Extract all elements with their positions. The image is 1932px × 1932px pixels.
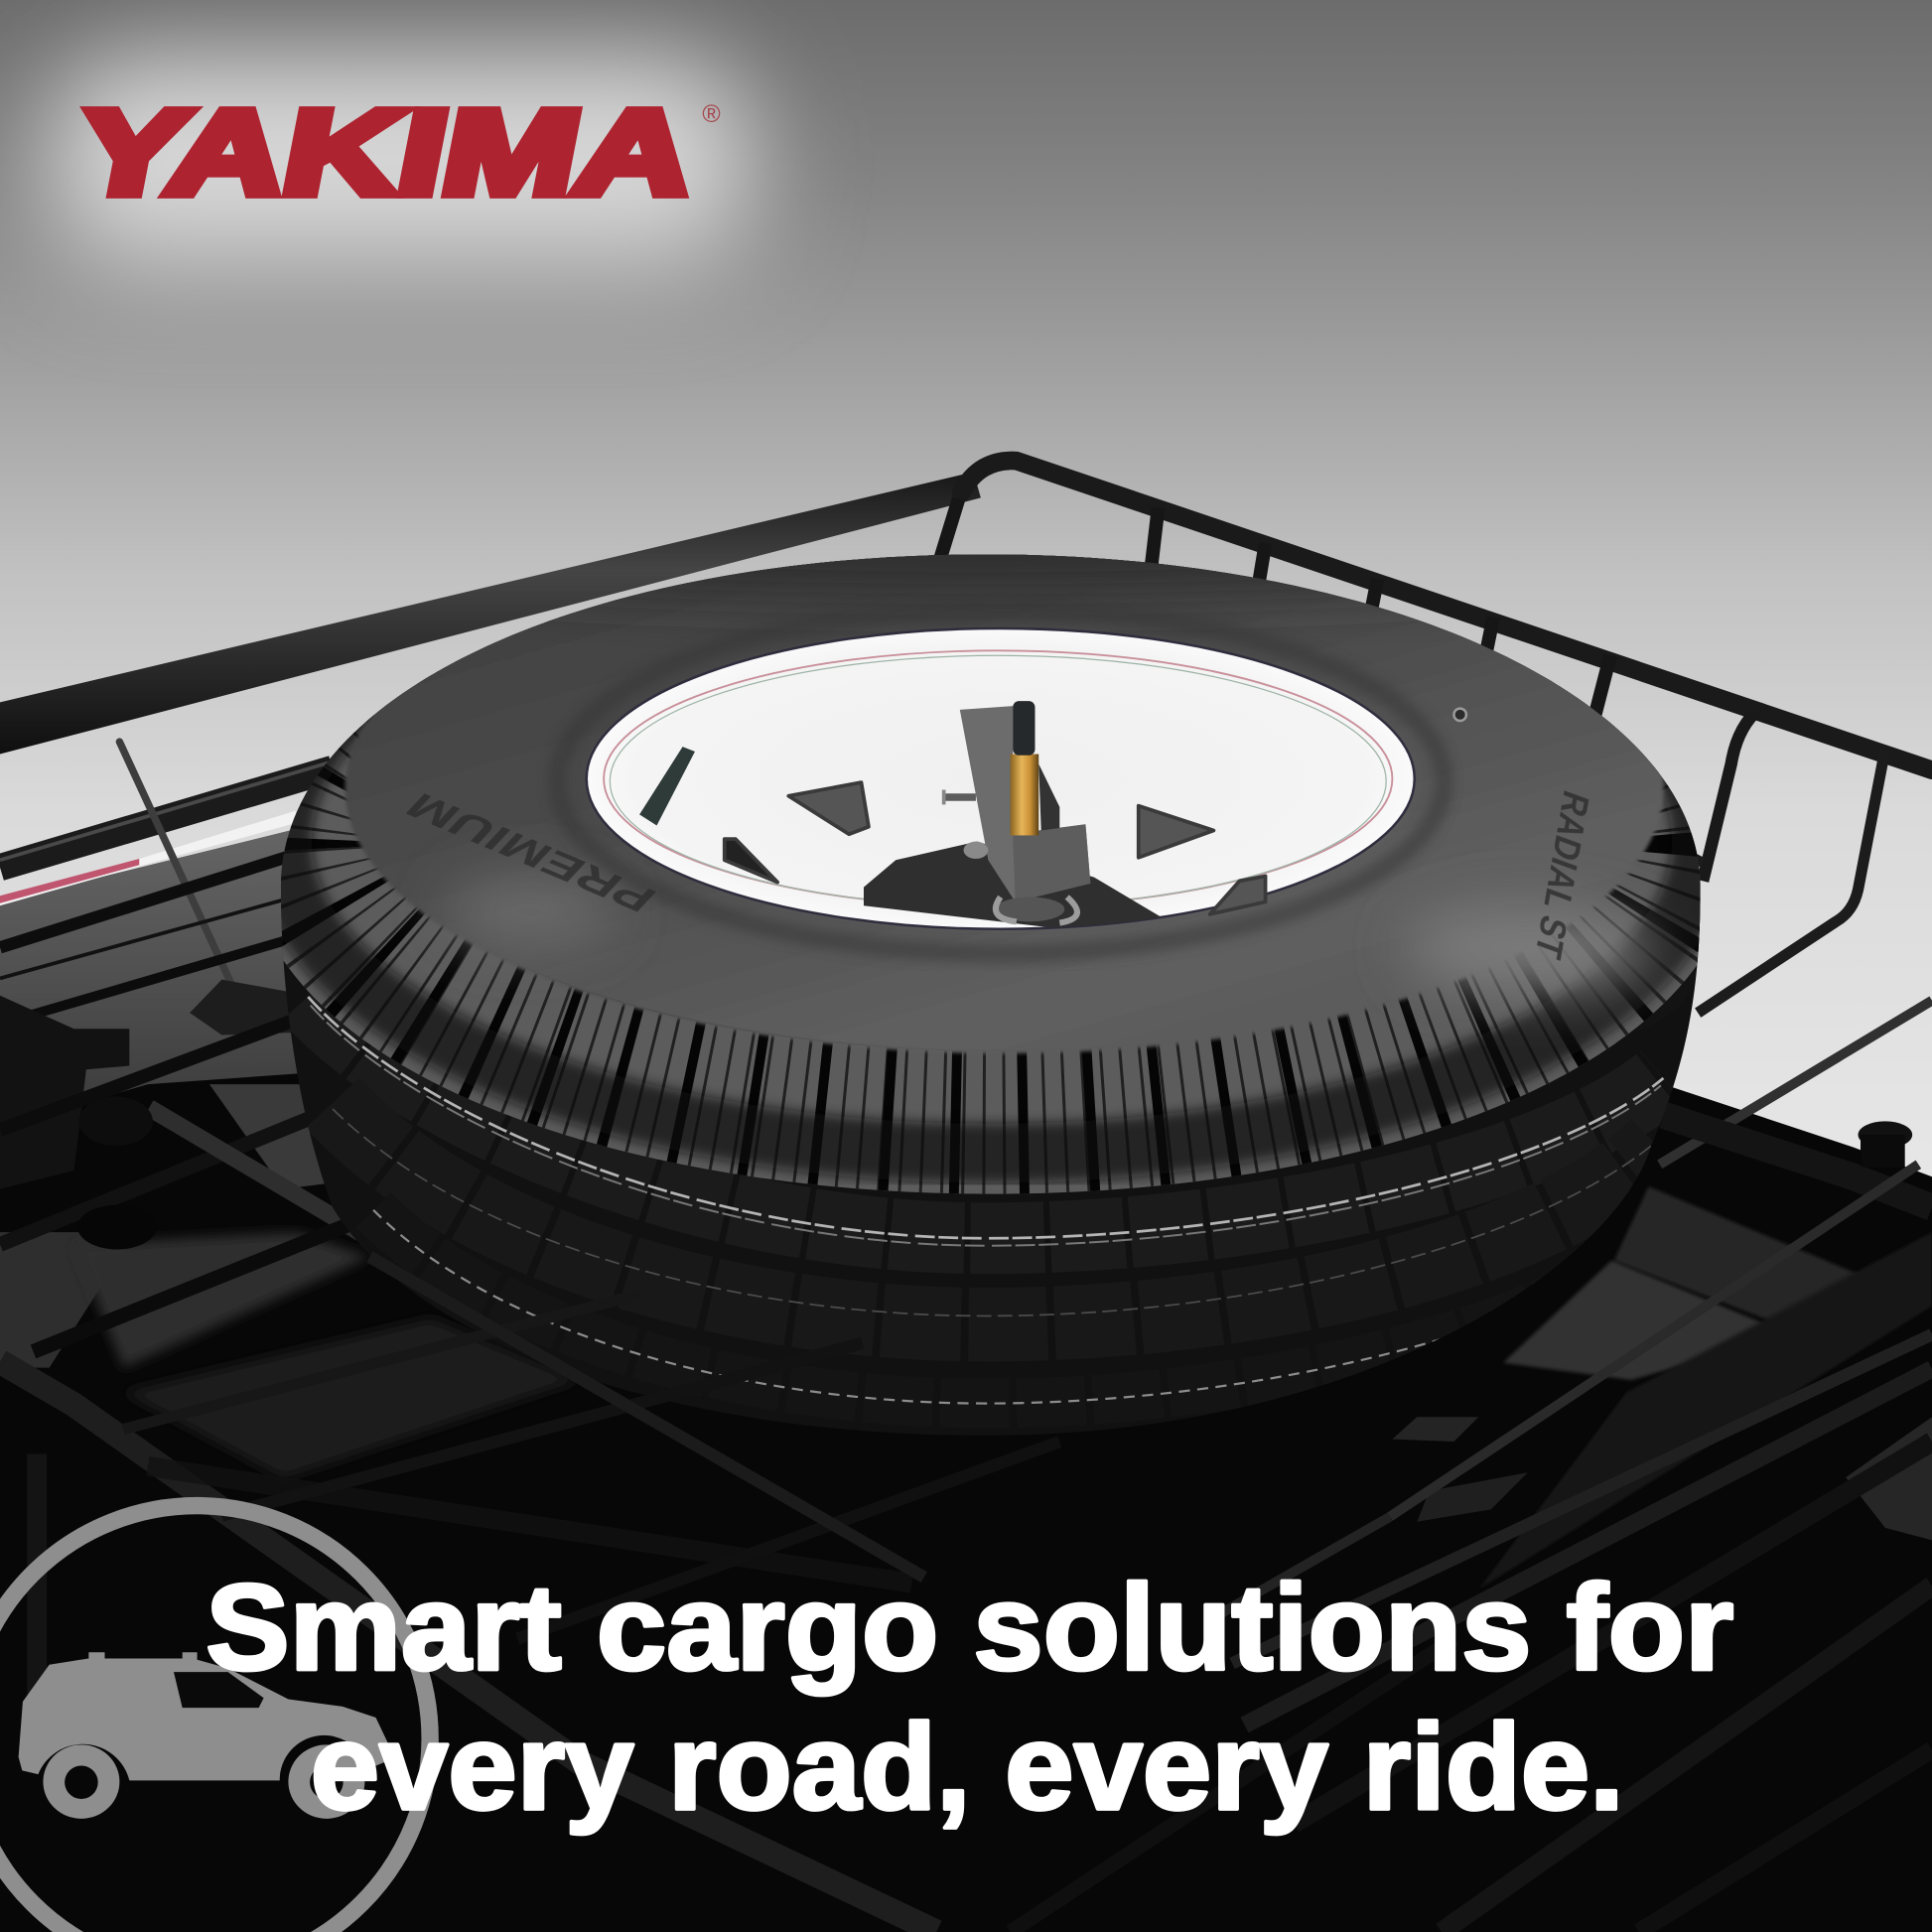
headline: every road, every ride. [311, 1700, 1624, 1836]
tire: sidewall lettering [397, 785, 1596, 964]
tire: sidewall lettering: PREMIUM [397, 785, 665, 918]
tire: sidewall lettering: RADIAL ST [1528, 786, 1596, 964]
spare tire [281, 554, 1701, 1436]
roof basket rear rails [0, 461, 1932, 1351]
wheel: valve slot [639, 747, 695, 826]
dark vehicle roof [0, 811, 1932, 1932]
tire: upper tread blocks [282, 527, 1702, 1154]
wheel rim [587, 628, 1415, 931]
roof basket front rails [0, 1001, 1932, 1932]
tire: lower tread [308, 997, 1663, 1404]
wheel: vent holes [725, 782, 1266, 914]
tire: small round mark [1453, 709, 1466, 721]
icon: car in circle [0, 1506, 430, 1932]
tire: sidewall [345, 523, 1663, 1053]
headline [206, 1561, 1733, 1836]
headline: Smart cargo solutions for [206, 1561, 1733, 1697]
tire: sidewall rings near rim [557, 609, 1445, 954]
Yakima logo: ® [702, 101, 721, 128]
wheel: locking bracket [944, 701, 1090, 923]
wheel: mounting plate [864, 842, 1167, 931]
Yakima logo: YAKIMA [67, 85, 706, 219]
